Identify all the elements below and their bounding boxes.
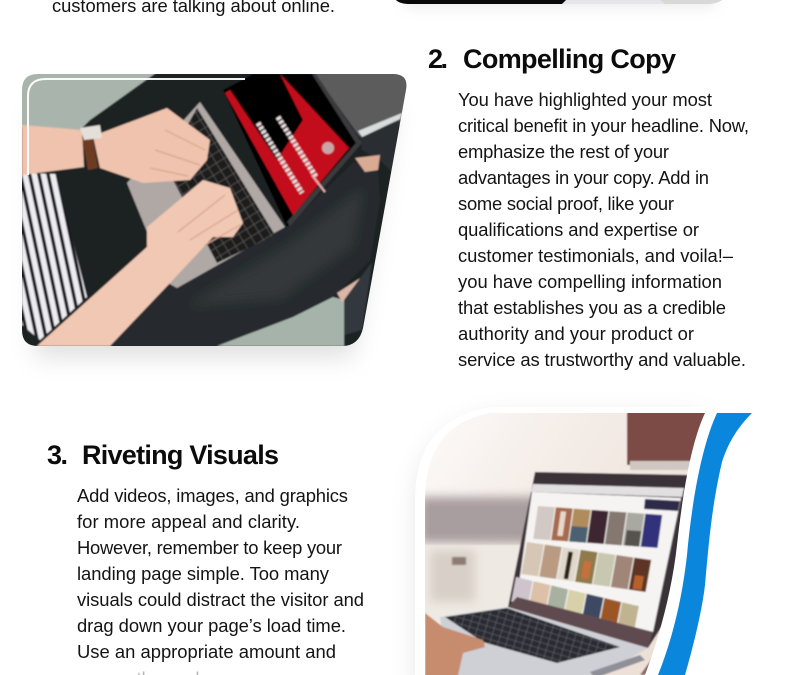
heading: 3. Riveting Visuals: 3. [47,440,68,470]
text block: compelling copy description: that establishes you as a credible [458,297,726,318]
text block: compelling copy description: You have highlighted your most [458,89,712,110]
text block: compelling copy description: service as trustworthy and valuable. [458,349,746,370]
text block: compelling copy description [458,89,749,370]
text block: compelling copy description: emphasize the rest of your [458,141,669,162]
blue wave [658,413,752,675]
heading: 2. Compelling Copy: 2. [428,44,448,74]
text block: riveting visuals description: Add videos, images, and graphics [77,485,348,506]
heading: 3. Riveting Visuals: Riveting Visuals [82,440,279,470]
text block: riveting visuals description: However, remember to keep your [77,537,342,558]
text block: compelling copy description: you have compelling information [458,271,722,292]
text block: compelling copy description: qualifications and expertise or [458,219,699,240]
photo: hands typing on a laptop [15,70,415,357]
thumbnail grid [511,506,662,631]
text block: riveting visuals description [77,485,364,675]
frame shadow [415,415,700,675]
text block: compelling copy description: customer testimonials, and voila!– [458,245,734,266]
white frame [415,407,760,675]
text block: riveting visuals description: visuals could distract the visitor and [77,589,364,610]
photo content [420,408,720,675]
text block: compelling copy description: advantages in your copy. Add in [458,167,709,188]
text block: riveting visuals description: landing page simple. Too many [77,563,330,584]
heading: 2. Compelling Copy: Compelling Copy [463,44,676,74]
text block: riveting visuals description: for more appeal and clarity. [77,511,300,532]
text block: riveting visuals description: Use an appropriate amount and [77,641,336,662]
text block: riveting visuals description: drag down your page’s load time. [77,615,346,636]
photo: section 1 image bottom edge [396,0,722,6]
white frame line [28,79,245,175]
text block: compelling copy description: some social proof, like your [458,193,674,214]
text block: compelling copy description: authority and your product or [458,323,694,344]
text block: compelling copy description: critical benefit in your headline. Now, [458,115,749,136]
photo: laptop showing image gallery [415,407,760,675]
